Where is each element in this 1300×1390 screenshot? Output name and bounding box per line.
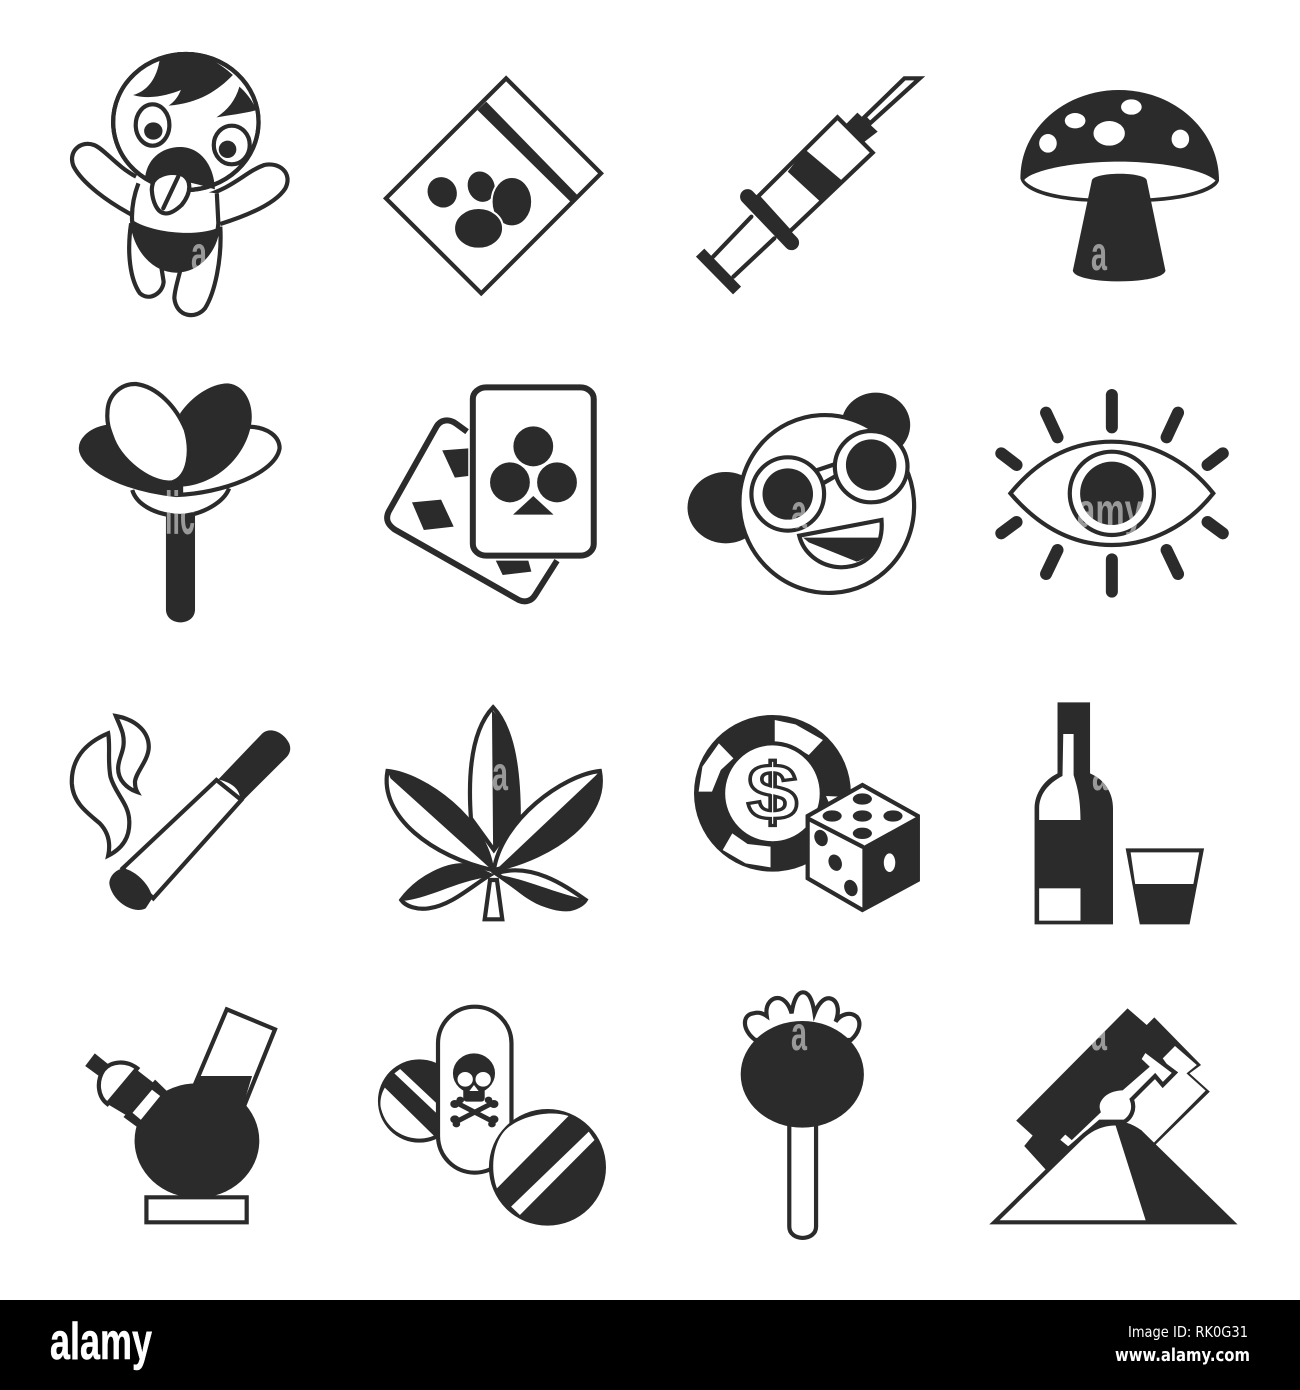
icon: razor blade and powder pile bbox=[994, 1008, 1232, 1222]
icon: vomiting figure bbox=[72, 54, 288, 315]
watermark fragments: a bbox=[791, 1008, 807, 1061]
icon: poison pills with skull bbox=[378, 1007, 606, 1226]
icon: flower with stem bbox=[81, 383, 280, 622]
icon: zip bag with pills bbox=[386, 78, 601, 293]
watermark fragments: a bbox=[1091, 228, 1107, 281]
watermark fragments: a bbox=[1092, 748, 1108, 801]
image id: Image ID: RK0G31 bbox=[1128, 1323, 1248, 1341]
icon: cigarette with smoke bbox=[72, 716, 290, 910]
icon: casino chip and dice bbox=[694, 715, 918, 910]
icon: poppy head bbox=[741, 992, 864, 1238]
watermark fragments bbox=[165, 228, 1143, 1061]
watermark fragments: a bbox=[492, 748, 508, 801]
watermark fragments: a bbox=[191, 228, 207, 281]
watermark fragments: a bbox=[1091, 1008, 1107, 1061]
icon: cannabis leaf bbox=[387, 707, 601, 919]
watermark fragments: lic bbox=[165, 480, 195, 547]
watermark fragments: amy bbox=[1077, 485, 1143, 538]
icon: casino chip and dice: $ bbox=[747, 748, 798, 837]
icon: eye with rays bbox=[1001, 395, 1223, 592]
icon: bottle and glass bbox=[1035, 702, 1204, 924]
footer bar bbox=[0, 1300, 1300, 1390]
watermark fragments: a bbox=[791, 486, 807, 539]
icon: syringe bbox=[696, 78, 920, 294]
icon: smiling face with sunglasses bbox=[687, 393, 921, 598]
website: www.alamy.com bbox=[1115, 1345, 1250, 1366]
icon: playing cards bbox=[387, 387, 594, 601]
footer logo: alamy bbox=[50, 1313, 152, 1371]
icon: bong bbox=[85, 1009, 275, 1222]
icon: mushroom bbox=[1020, 90, 1219, 281]
